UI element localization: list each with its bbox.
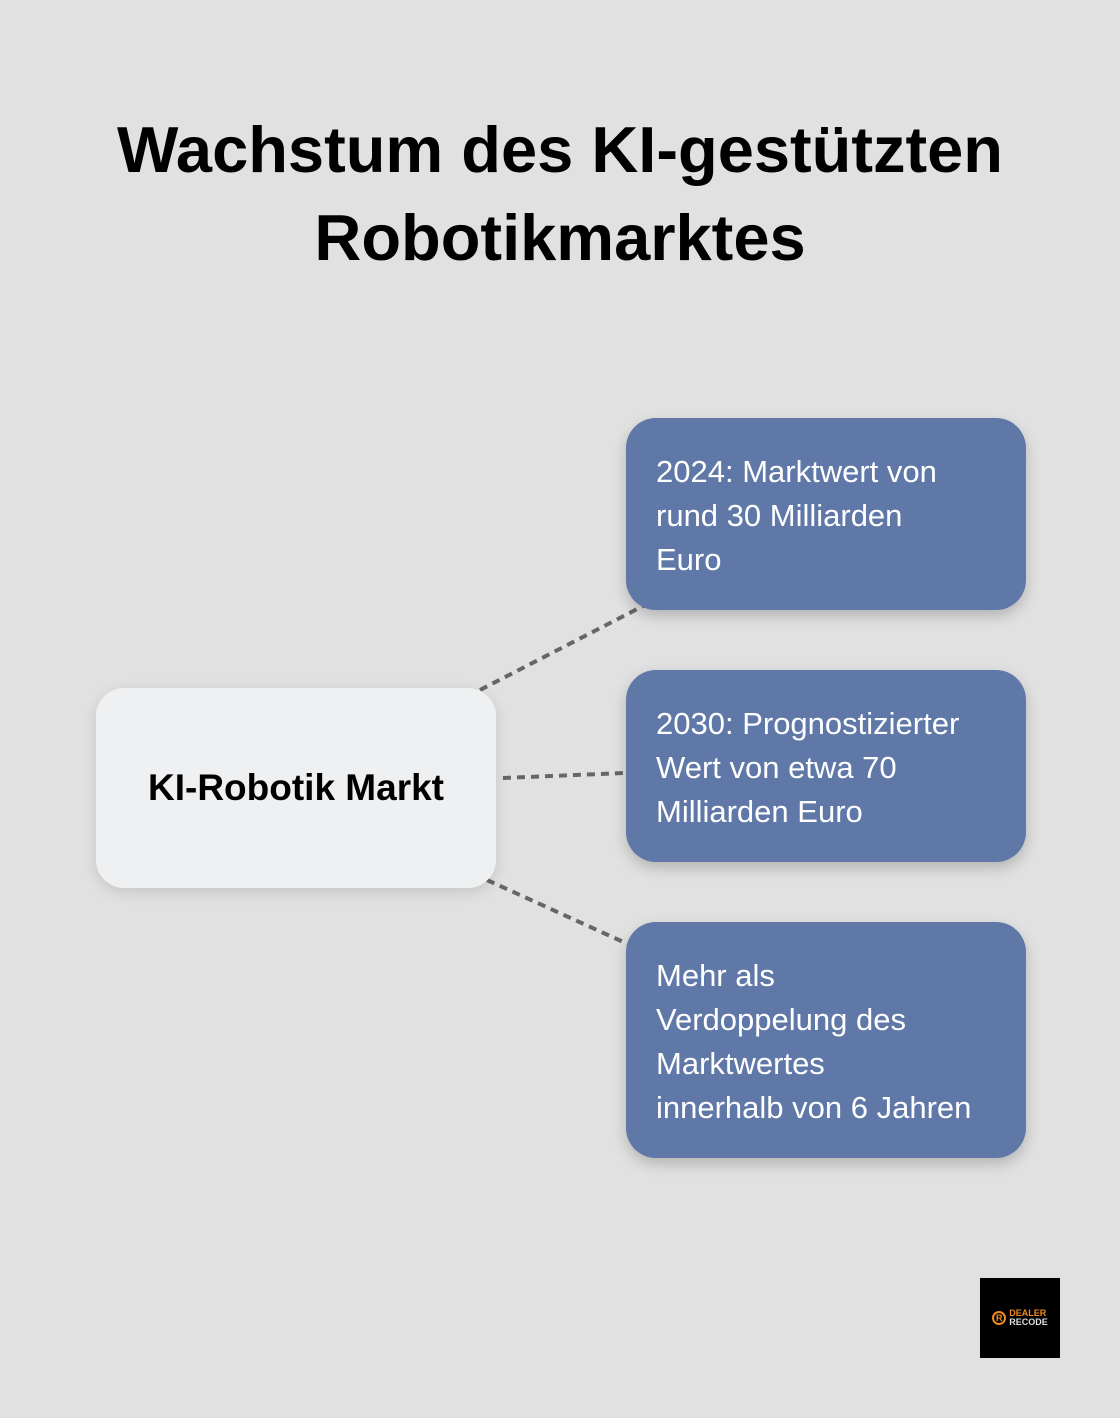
central node: KI-Robotik Markt xyxy=(148,767,444,808)
box: 2030: Milliarden Euro xyxy=(656,794,863,829)
box: 2030: 2030: Prognostizierter xyxy=(656,706,959,741)
box: doubling xyxy=(626,922,1026,1158)
logo: RECODE xyxy=(1009,1317,1048,1327)
box: doubling: innerhalb von 6 Jahren xyxy=(656,1090,971,1125)
title: Robotikmarktes xyxy=(314,201,806,274)
box: 2024: Euro xyxy=(656,542,721,577)
box: 2030 xyxy=(626,670,1026,862)
box: 2030: Wert von etwa 70 xyxy=(656,750,897,785)
central node xyxy=(96,688,496,888)
logo: R xyxy=(996,1313,1002,1323)
logo: DEALER xyxy=(1009,1308,1046,1318)
box: doubling: Mehr als xyxy=(656,958,775,993)
title xyxy=(117,113,1003,274)
box: doubling: Marktwertes xyxy=(656,1046,825,1081)
box: doubling: Verdoppelung des xyxy=(656,1002,906,1037)
logo xyxy=(980,1278,1060,1358)
box: 2024: rund 30 Milliarden xyxy=(656,498,902,533)
box: 2024: 2024: Marktwert von xyxy=(656,454,937,489)
title: Wachstum des KI-gestützten xyxy=(117,113,1003,186)
box: 2024 xyxy=(626,418,1026,610)
